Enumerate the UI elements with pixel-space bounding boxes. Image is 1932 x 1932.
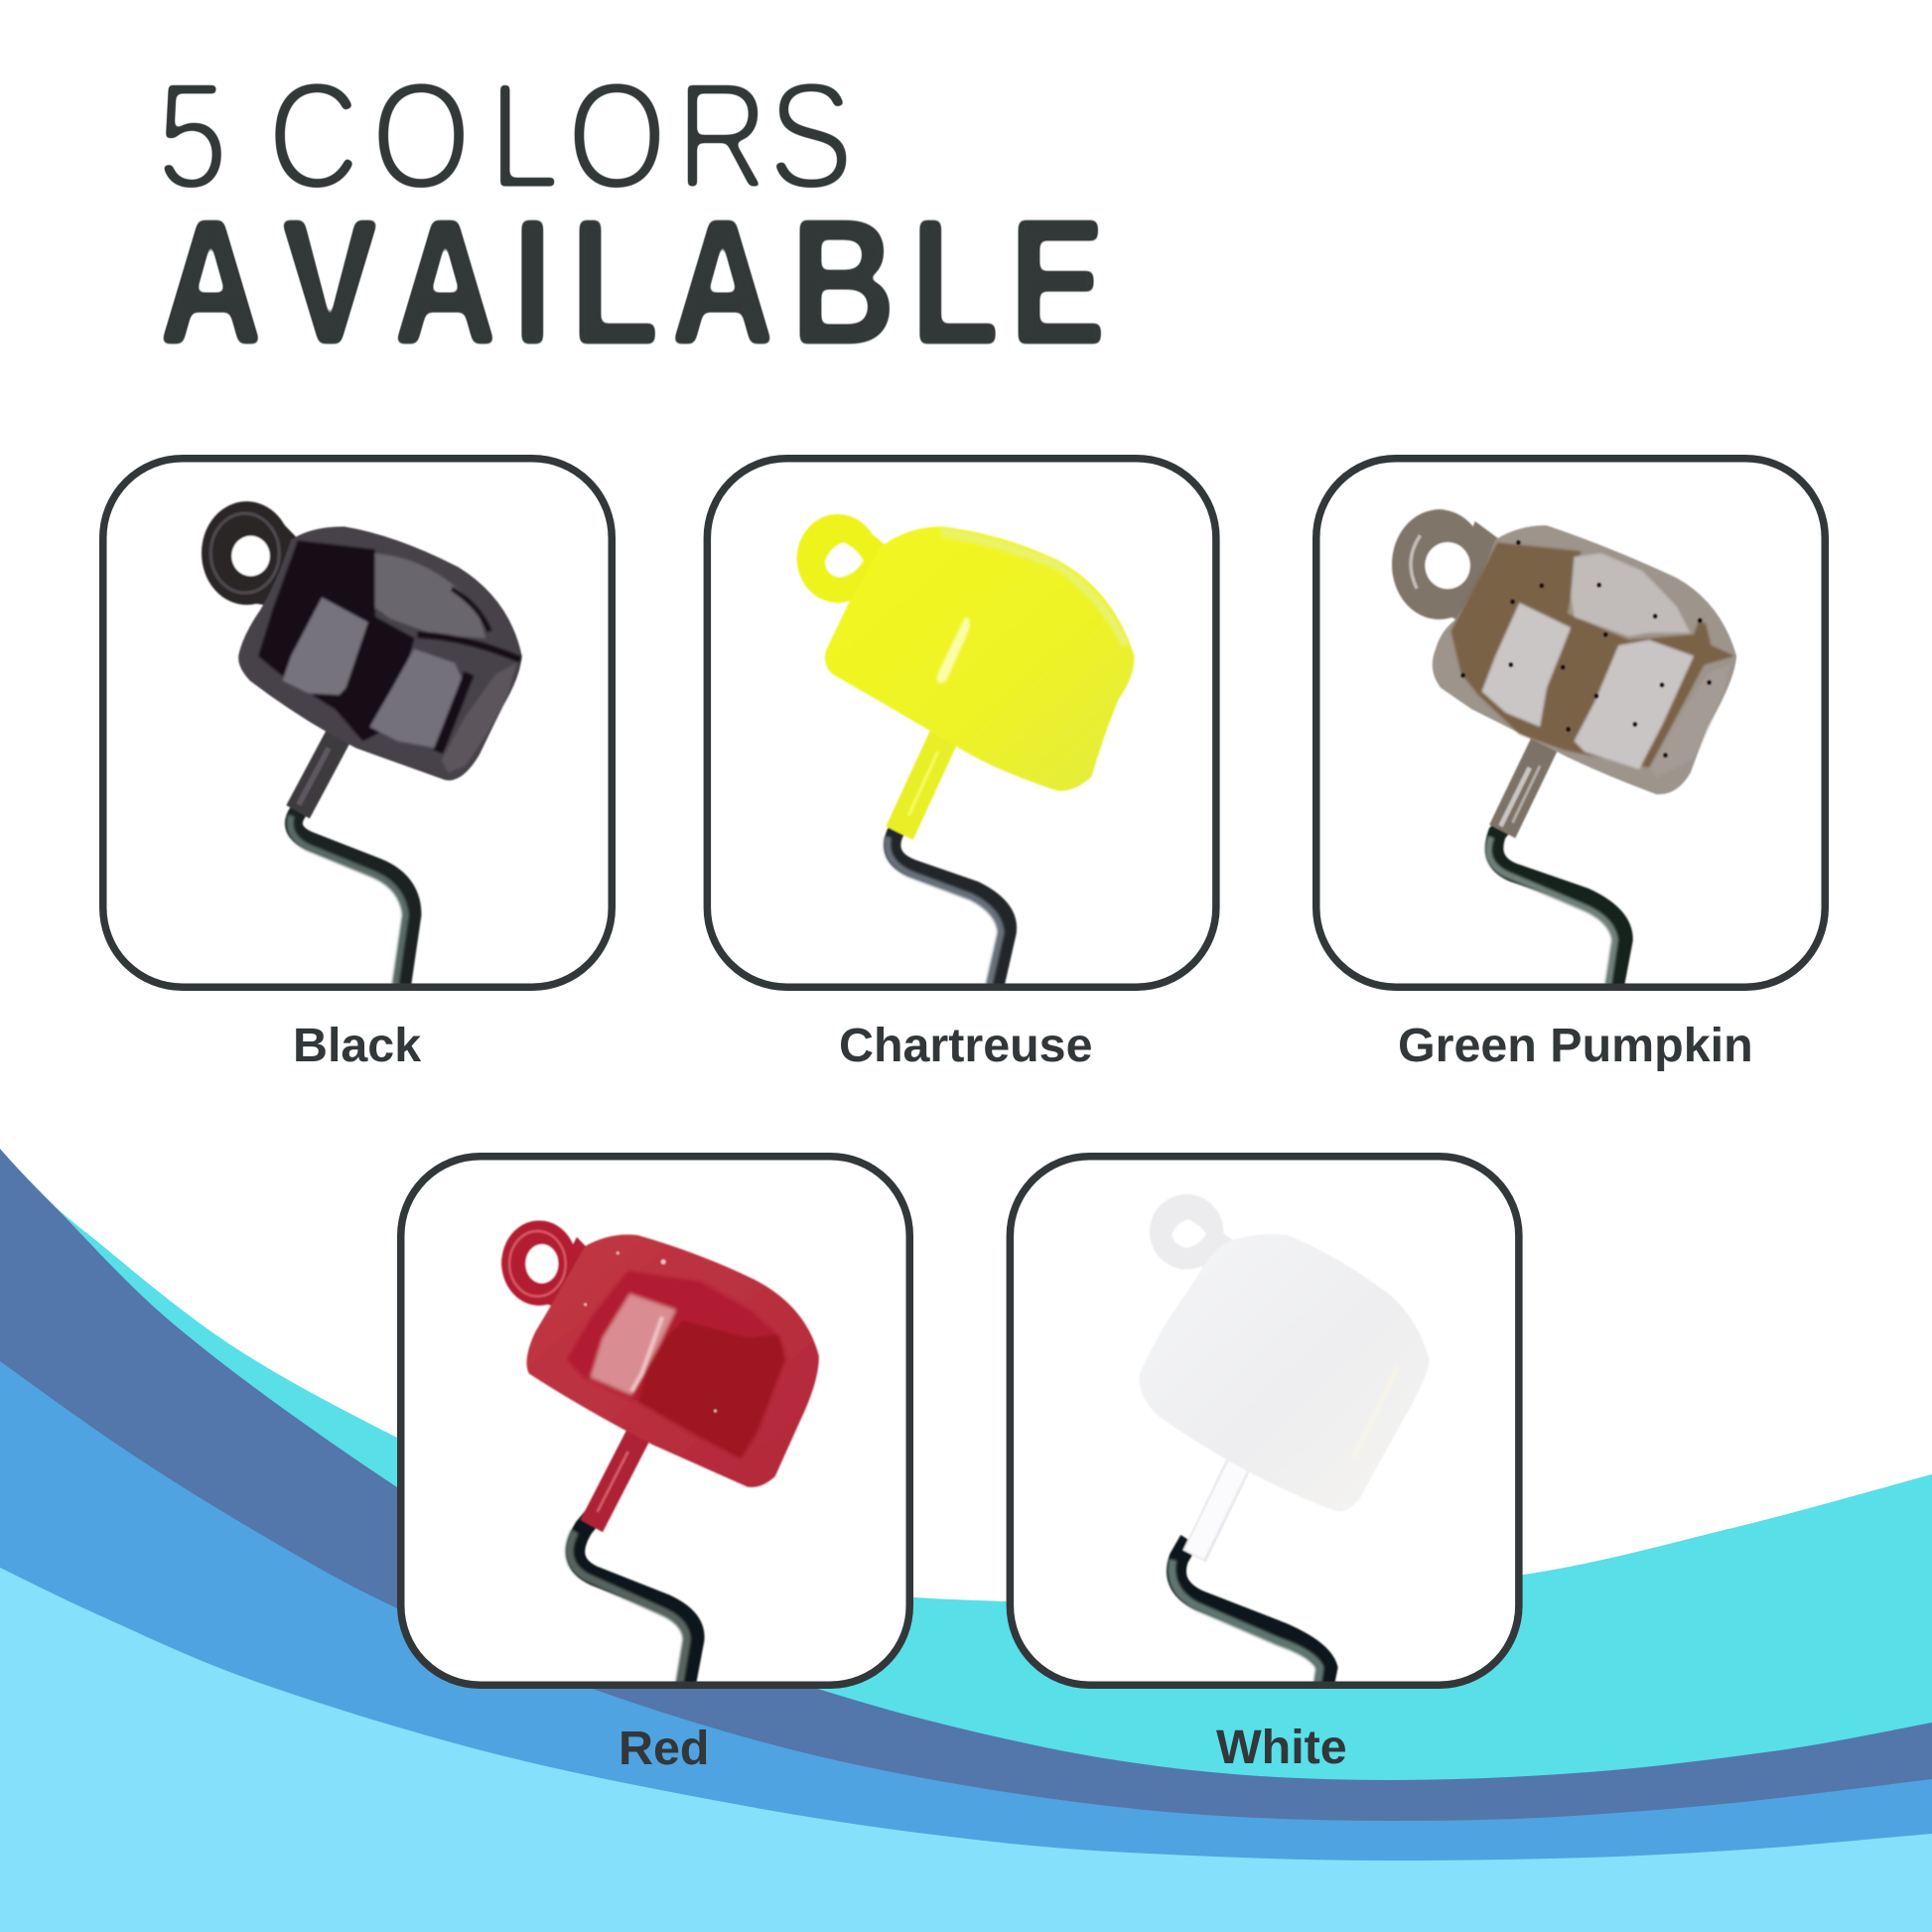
card: Red <box>401 1157 909 1685</box>
label: White: White <box>1216 1721 1347 1774</box>
card: White <box>1010 1157 1519 1685</box>
label: Chartreuse: Chartreuse <box>839 1019 1092 1072</box>
title line: AVAILABLE: AVAILABLE <box>158 182 1106 381</box>
card: Green Pumpkin <box>1316 459 1825 987</box>
card: Chartreuse <box>707 459 1216 987</box>
title line: 5 COLORS: 5 COLORS <box>157 51 854 219</box>
label: Green Pumpkin: Green Pumpkin <box>1398 1019 1753 1072</box>
icon: red jig head <box>501 1220 819 1685</box>
icon: chartreuse jig head <box>797 514 1135 985</box>
card: Black <box>103 459 612 987</box>
label: Black: Black <box>293 1019 421 1072</box>
title <box>157 51 1106 381</box>
background waves <box>0 1149 1932 1932</box>
icon: black jig head <box>202 501 522 985</box>
icon: green pumpkin jig head <box>1392 509 1736 985</box>
label: Red: Red <box>619 1722 709 1775</box>
icon: white jig head <box>1139 1194 1430 1685</box>
